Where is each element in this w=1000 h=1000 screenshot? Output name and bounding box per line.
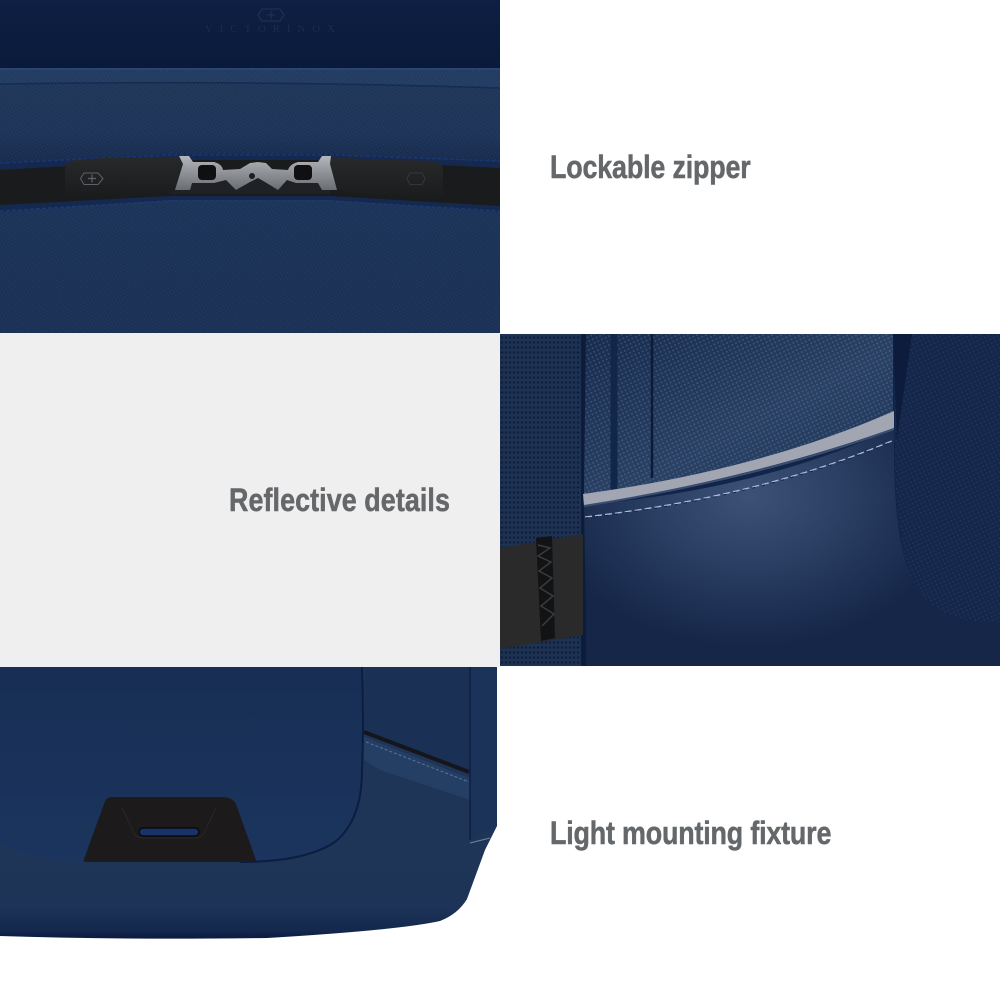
- side edge panel: [470, 667, 497, 840]
- lower leather pocket: [584, 428, 1000, 666]
- label: Light mounting fixture: Light mounting fixture: [550, 816, 831, 852]
- side pocket leather accent: [364, 737, 470, 800]
- panel: light mounting fixture photo: [0, 667, 497, 939]
- front fabric panel: [0, 667, 363, 862]
- upper fabric band: [0, 84, 500, 166]
- left zipper pull: [65, 157, 184, 198]
- reflective strip: [583, 411, 894, 506]
- label: Lockable zipper: Lockable zipper: [550, 150, 751, 186]
- right side mesh: [893, 334, 1000, 622]
- right zipper pull: [324, 158, 443, 200]
- black strap: [500, 534, 583, 649]
- metal zipper sliders: [175, 156, 337, 190]
- panel: light grey reflective text background: [0, 333, 500, 667]
- upper dark pocket with logo: VICTORINOX: [205, 23, 335, 35]
- black trim: [364, 732, 469, 772]
- panel: lockable zipper photo: [0, 0, 500, 333]
- bag base silhouette: [0, 667, 497, 939]
- panel: reflective details photo: [500, 334, 1000, 666]
- zipper piping: [0, 68, 500, 88]
- centre fabric panel: [584, 334, 893, 494]
- stitching: [585, 440, 894, 517]
- side pocket upper: [364, 667, 469, 770]
- side pocket stitching: [366, 742, 469, 782]
- mounting fixture: [84, 797, 256, 862]
- label: Reflective details: Reflective details: [229, 483, 450, 519]
- zipper tape: [0, 154, 500, 212]
- upper dark pocket with logo: [0, 0, 500, 68]
- left side mesh: [500, 334, 586, 666]
